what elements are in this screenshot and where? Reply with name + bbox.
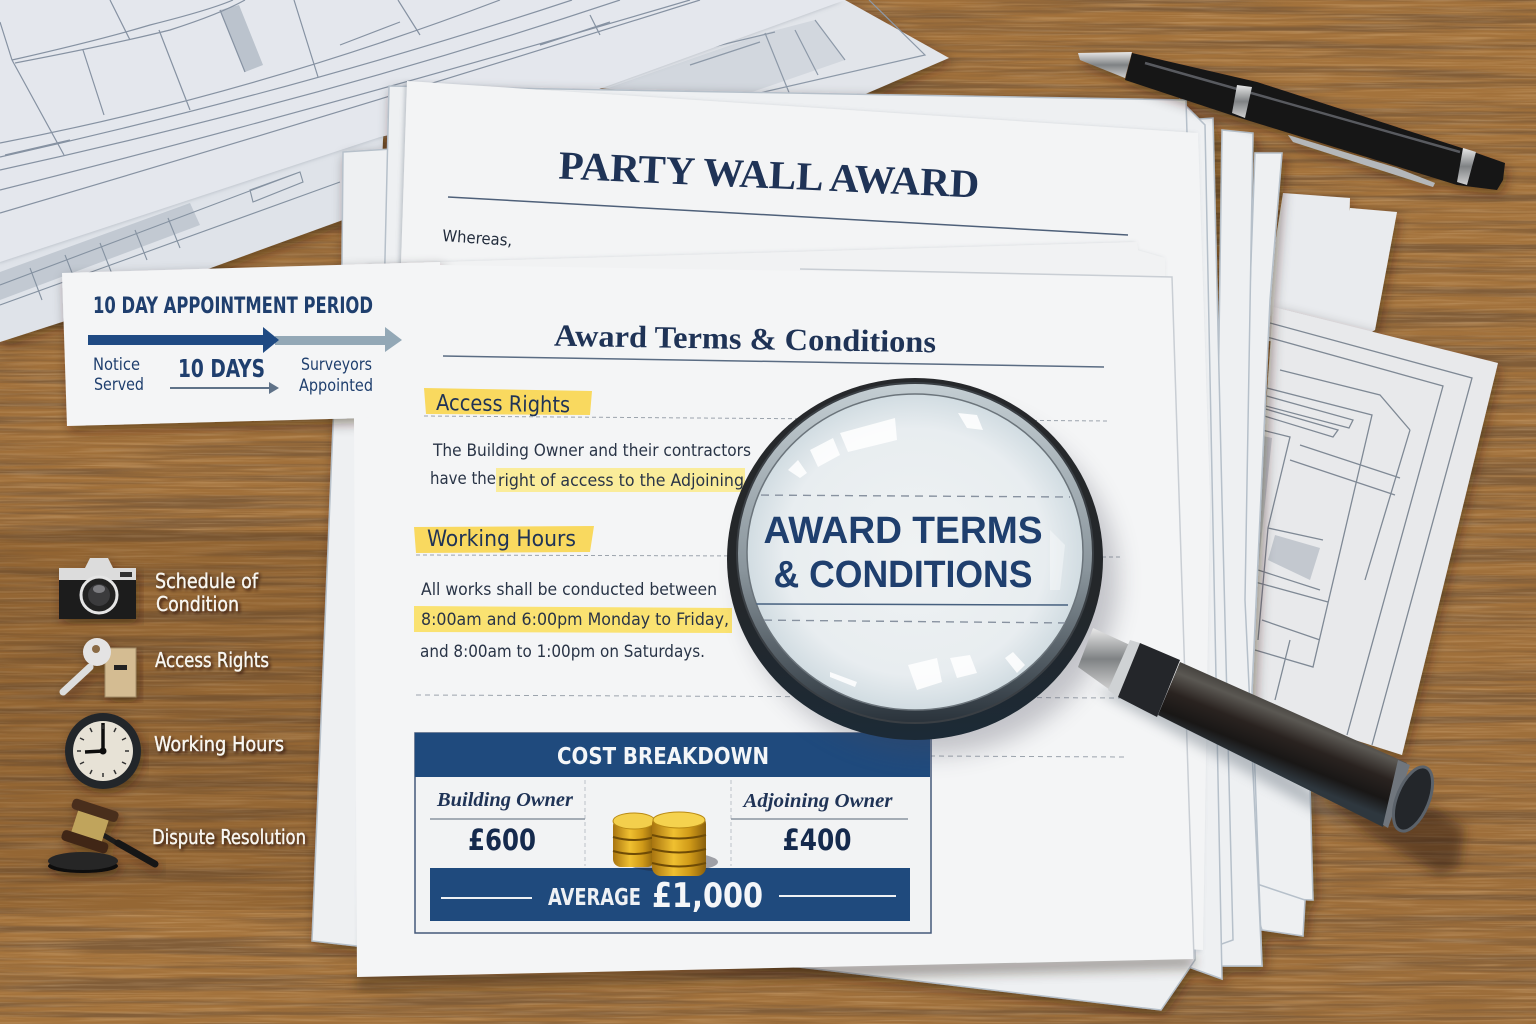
adjoining owner cost: £400 <box>782 823 852 857</box>
label: access rights: Access Rights <box>155 648 269 672</box>
sheet heading: Award Terms & Conditions <box>554 318 936 359</box>
label: dispute resolution: Dispute Resolution <box>152 825 306 849</box>
label: surveyors appointed: Appointed <box>299 376 373 395</box>
body text: hours <box>414 580 732 662</box>
sheets under front page <box>360 242 1180 950</box>
body text: access <box>430 441 751 492</box>
magnifier handle <box>1078 628 1441 837</box>
icon: clock <box>65 713 141 789</box>
pen <box>1078 52 1505 190</box>
cost header: COST BREAKDOWN <box>557 744 769 770</box>
label: schedule of condition: Condition <box>156 592 239 616</box>
icon: magnifying glass <box>727 378 1465 875</box>
panel: cost breakdown <box>415 733 931 933</box>
callout: 10 day appointment period <box>62 262 440 426</box>
lens text: AWARD TERMS <box>764 510 1042 552</box>
body text: access: have the <box>430 469 496 489</box>
front sheet: Award Terms and Conditions <box>354 265 1194 990</box>
callout arrows and labels <box>88 327 402 395</box>
average bar: AVERAGE <box>548 885 641 911</box>
body text: access: right of access to the Adjoining <box>498 471 744 491</box>
average bar: £1,000 <box>652 876 763 916</box>
icon: camera <box>59 558 136 619</box>
building owner cost <box>430 789 585 857</box>
sheet: Party Wall Award <box>380 81 1210 950</box>
label: 10 days: 10 DAYS <box>178 354 265 383</box>
label: surveyors appointed: Surveyors <box>301 355 372 374</box>
label: schedule of condition: Schedule of <box>155 569 259 593</box>
body text: access: The Building Owner and their contractors <box>432 441 751 461</box>
label: notice served: Served <box>94 375 144 394</box>
building owner cost: Building Owner <box>436 789 573 811</box>
document title: PARTY WALL AWARD <box>558 143 980 207</box>
label: notice served: Notice <box>93 355 140 374</box>
lens text: & CONDITIONS <box>774 554 1032 596</box>
body text: hours: 8:00am and 6:00pm Monday to Friday, <box>421 610 729 630</box>
icon: key and door <box>63 638 136 697</box>
adjoining owner cost <box>731 790 908 857</box>
arrow: appointed segment <box>275 327 402 352</box>
body text: hours: All works shall be conducted between <box>421 580 717 600</box>
sheets behind right blueprint <box>1260 193 1397 350</box>
highlighted heading: Working Hours: Working Hours <box>427 527 576 552</box>
paper stack behind main sheets <box>312 86 1313 1010</box>
callout: 10 day appointment period: 10 DAY APPOINTMENT PERIOD <box>93 294 373 319</box>
average bar <box>430 868 910 921</box>
text: Whereas: Whereas, <box>442 226 513 250</box>
blueprint sheet right <box>1245 307 1498 755</box>
building owner cost: £600 <box>468 823 536 857</box>
icon: gavel <box>48 798 155 873</box>
blueprint sheets top left <box>0 0 949 342</box>
cost header <box>415 733 930 777</box>
legend: icons on desk <box>48 558 306 873</box>
adjoining owner cost: Adjoining Owner <box>741 790 893 812</box>
lens <box>727 378 1103 740</box>
arrow: notice segment <box>88 327 279 353</box>
label: working hours: Working Hours <box>154 732 284 756</box>
body text: hours: and 8:00am to 1:00pm on Saturdays. <box>420 642 705 662</box>
highlighted heading: Access Rights: Access Rights <box>436 391 570 418</box>
icon: gold coins <box>613 812 718 876</box>
arrow: duration <box>170 382 279 394</box>
